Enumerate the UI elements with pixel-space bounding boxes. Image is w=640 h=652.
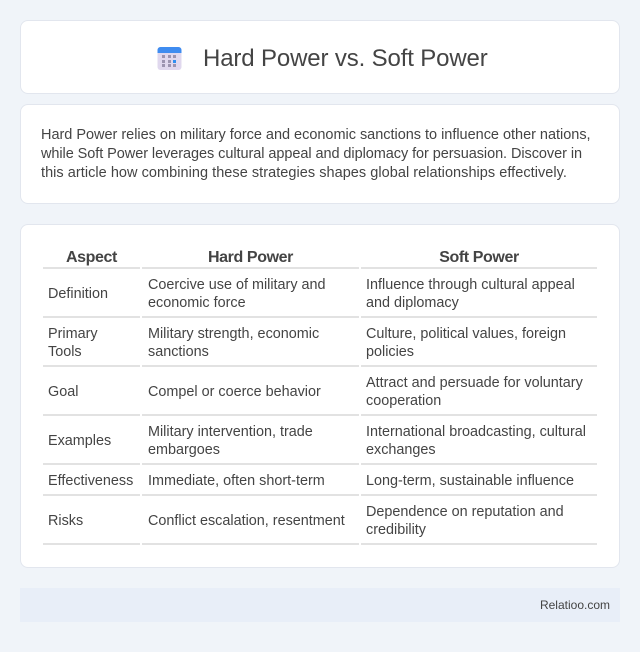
table header: Soft Power — [439, 249, 519, 266]
icon: calendar — [158, 47, 182, 70]
table card — [20, 224, 620, 568]
row: examples — [48, 424, 586, 458]
row: risks: credibility — [366, 522, 426, 538]
row: risks: Risks — [48, 513, 83, 529]
footer text: Relatioo.com — [540, 598, 610, 612]
table header: Aspect — [66, 249, 117, 266]
row: examples: International broadcasting, cultural — [366, 424, 586, 440]
title card — [20, 20, 620, 94]
row: examples: Examples — [48, 433, 111, 449]
footer bar — [20, 588, 620, 622]
row: definition: economic force — [148, 295, 246, 311]
intro text: while Soft Power leverages cultural appeal and diplomacy for persuasion. Discover in — [41, 146, 582, 162]
row: definition — [48, 277, 575, 311]
row: goal: Compel or coerce behavior — [148, 384, 321, 400]
row: primary tools: Tools — [48, 344, 82, 360]
row: goal — [48, 375, 583, 409]
intro card — [20, 104, 620, 204]
title: Hard Power vs. Soft Power — [203, 45, 488, 72]
row: examples: embargoes — [148, 442, 220, 458]
row: examples: Military intervention, trade — [148, 424, 313, 440]
intro text — [41, 127, 591, 181]
row: goal: Attract and persuade for voluntary — [366, 375, 583, 391]
row: primary tools: Culture, political values, foreign — [366, 326, 566, 342]
table header — [66, 249, 519, 266]
row: primary tools: sanctions — [148, 344, 209, 360]
row: risks: Conflict escalation, resentment — [148, 513, 345, 529]
row: examples: exchanges — [366, 442, 436, 458]
intro text: Hard Power relies on military force and economic sanctions to influence other nations, — [41, 127, 591, 143]
row: definition: and diplomacy — [366, 295, 459, 311]
row: goal: Goal — [48, 384, 78, 400]
row: primary tools: Military strength, economic — [148, 326, 319, 342]
row: primary tools: Primary — [48, 326, 98, 342]
row: primary tools — [48, 326, 566, 360]
intro text: this article how combining these strategies shapes global relationships effectively. — [41, 165, 567, 181]
row: definition: Influence through cultural appeal — [366, 277, 575, 293]
row: risks: Dependence on reputation and — [366, 504, 564, 520]
comparison table — [43, 249, 597, 545]
row: definition: Definition — [48, 286, 108, 302]
row: risks — [48, 504, 564, 538]
row: definition: Coercive use of military and — [148, 277, 326, 293]
row: effectiveness — [48, 473, 574, 489]
row: goal: cooperation — [366, 393, 441, 409]
row: effectiveness: Effectiveness — [48, 473, 133, 489]
table header: Hard Power — [208, 249, 293, 266]
row: effectiveness: Long-term, sustainable influence — [366, 473, 574, 489]
row: primary tools: policies — [366, 344, 414, 360]
row: effectiveness: Immediate, often short-term — [148, 473, 325, 489]
